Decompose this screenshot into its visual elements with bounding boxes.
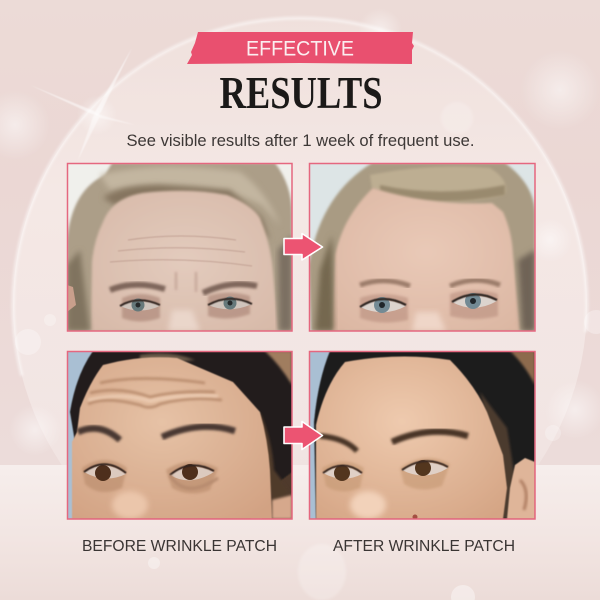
arrow: top row — [284, 234, 322, 260]
icon: sparkle — [30, 48, 135, 160]
photo: after, younger woman — [309, 351, 535, 520]
title: RESULTS — [220, 68, 382, 118]
arrow: bottom row — [284, 422, 322, 450]
photo: after, older woman — [309, 163, 535, 331]
badge text: EFFECTIVE — [246, 36, 354, 60]
photo: before, younger woman — [67, 351, 292, 519]
subtitle: See visible results after 1 week of frequent use. — [126, 131, 474, 150]
caption: before: BEFORE WRINKLE PATCH — [82, 538, 277, 555]
badge: effective ribbon — [187, 32, 414, 64]
photo: before, older woman — [67, 163, 292, 331]
caption: after: AFTER WRINKLE PATCH — [333, 538, 515, 555]
